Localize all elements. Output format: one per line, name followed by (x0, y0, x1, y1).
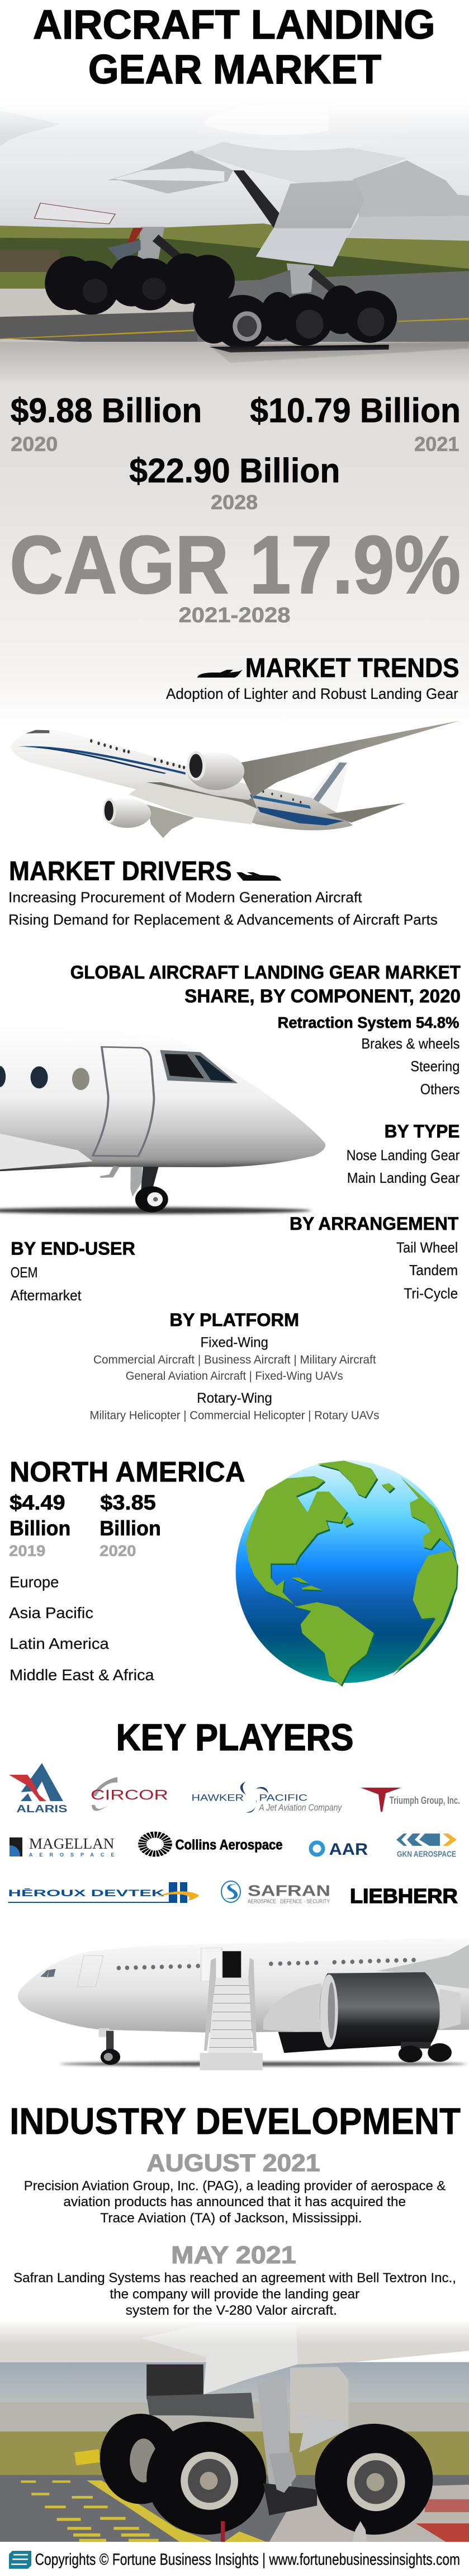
stat: 2021 market size (250, 391, 461, 455)
segment: by type: BY TYPE (385, 1121, 459, 1141)
other regions list: Latin America (10, 1635, 109, 1652)
segment: by arrangement: Tail Wheel (396, 1239, 458, 1256)
logo: Collins Aerospace (143, 1835, 283, 1854)
regional panel: north america: 2020 (100, 1542, 136, 1559)
logo: Liebherr: LIEBHERR (350, 1884, 458, 1907)
segment: by platform (89, 1310, 379, 1422)
component list: Others (420, 1081, 459, 1098)
segment: by type (347, 1121, 460, 1186)
segment: by end-user: Aftermarket (11, 1287, 82, 1304)
hero photo: aircraft landing gear (0, 100, 469, 387)
segment heading: global share by component (70, 962, 461, 1007)
logo: Hawker Pacific (191, 1781, 343, 1813)
logo: Triumph Group (361, 1788, 460, 1812)
development: May 2021 (13, 2241, 456, 2318)
segment: by arrangement: Tri-Cycle (404, 1285, 458, 1302)
development: August 2021: Precision Aviation Group, Inc. (PAG), a leading provider of aerospace & (24, 2179, 446, 2193)
stat: 2028 market size (129, 452, 340, 514)
development: August 2021 (24, 2150, 446, 2226)
stat: CAGR: 2021-2028 (179, 604, 291, 627)
business jet photo (0, 1024, 325, 1214)
logo: AAR (311, 1840, 368, 1859)
segment: by platform: Rotary-Wing (197, 1390, 272, 1406)
segment: by platform: General Aviation Aircraft | Fixed-Wing UAVs (126, 1370, 343, 1383)
title: AIRCRAFT LANDING (33, 2, 435, 48)
segment: by platform: BY PLATFORM (169, 1310, 299, 1330)
logo: Circor: CIRCOR (91, 1787, 168, 1803)
stat: 2020 market size: $9.88 Billion (11, 391, 202, 429)
logo: Hawker Pacific: PACIFIC (259, 1792, 307, 1803)
component list: Brakes & wheels (361, 1035, 459, 1052)
segment: by end-user: OEM (11, 1264, 37, 1281)
development: August 2021: Trace Aviation (TA) of Jackson, Mississippi. (100, 2211, 362, 2226)
other regions list: Asia Pacific (9, 1604, 93, 1621)
logo: Magellan Aerospace: AEROSPACE (29, 1852, 114, 1858)
segment: by platform: Military Helicopter | Commercial Helicopter | Rotary UAVs (89, 1409, 379, 1422)
logo: Heroux Devtek: HĒROUX DEVTEK (8, 1888, 165, 1898)
development: May 2021: MAY 2021 (171, 2241, 296, 2269)
segment: by type: Nose Landing Gear (347, 1147, 460, 1164)
component list: Retraction System 54.8% (278, 1014, 459, 1031)
logo: Alaris: ALARIS (16, 1803, 67, 1815)
segment: by arrangement: BY ARRANGEMENT (290, 1214, 459, 1234)
bottom photo: main landing gear close-up (0, 2319, 469, 2542)
stat: 2028 market size: $22.90 Billion (129, 452, 340, 490)
logo: Safran: SAFRAN (248, 1882, 330, 1899)
title: GEAR MARKET (88, 47, 381, 92)
component list: Steering (410, 1058, 459, 1075)
development: August 2021: aviation products has announced that it has acquired the (63, 2194, 406, 2210)
footer logo (9, 2551, 31, 2569)
logo: Circor (91, 1777, 168, 1811)
regional panel: north america: NORTH AMERICA (10, 1456, 245, 1488)
logo: Safran: AEROSPACE · DEFENCE · SECURITY (248, 1899, 330, 1905)
segment: by arrangement: Tandem (409, 1262, 458, 1278)
other regions list (9, 1573, 154, 1684)
regional panel: north america: Billion (10, 1517, 70, 1540)
logo: AAR: AAR (329, 1840, 368, 1859)
segment heading: global share by component: SHARE, BY COMPONENT, 2020 (184, 986, 461, 1007)
icon: globe (236, 1460, 458, 1687)
segment: by platform: Fixed-Wing (200, 1335, 268, 1351)
other regions list: Middle East & Africa (10, 1666, 154, 1684)
title (33, 2, 435, 92)
logo: Collins Aerospace: Collins Aerospace (176, 1837, 283, 1853)
segment: by platform: Commercial Aircraft | Business Aircraft | Military Aircraft (93, 1353, 376, 1366)
logo: Alaris (9, 1763, 67, 1815)
development: August 2021: AUGUST 2021 (146, 2150, 320, 2177)
logo: Magellan Aerospace: MAGELLAN (29, 1835, 114, 1852)
segment: by type: Main Landing Gear (347, 1169, 460, 1186)
stat: 2028 market size: 2028 (211, 491, 258, 514)
logo: Heroux Devtek (8, 1882, 199, 1903)
regional panel: north america (9, 1456, 245, 1559)
market driver text: Increasing Procurement of Modern Generation Aircraft (8, 889, 362, 905)
development: May 2021: Safran Landing Systems has reached an agreement with Bell Textron Inc., (13, 2271, 456, 2286)
segment heading: global share by component: GLOBAL AIRCRAFT LANDING GEAR MARKET (70, 962, 461, 983)
airliner in flight illustration (11, 721, 459, 838)
market driver text (8, 889, 438, 928)
stat: 2021 market size: $10.79 Billion (250, 391, 461, 429)
logo: Hawker Pacific: HAWKER (191, 1792, 244, 1803)
development: May 2021: system for the V-280 Valor aircraft. (126, 2303, 337, 2318)
logo: Safran (221, 1881, 330, 1905)
other regions list: Europe (10, 1573, 59, 1591)
regional panel: north america: $4.49 (10, 1491, 65, 1514)
logo: Hawker Pacific: A Jet Aviation Company (259, 1802, 343, 1813)
stat: 2020 market size: 2020 (11, 433, 58, 455)
market trend text: Adoption of Lighter and Robust Landing Gear (166, 685, 458, 702)
stat: 2020 market size (11, 391, 202, 455)
page background gradient (0, 364, 469, 727)
development: May 2021: the company will provide the landing gear (110, 2287, 359, 2302)
airliner at stairs photo (18, 1938, 469, 2070)
regional panel: north america: Billion (100, 1517, 161, 1540)
market driver text: Rising Demand for Replacement & Advancements of Aircraft Parts (8, 911, 438, 928)
regional panel: north america: $3.85 (100, 1491, 156, 1514)
key players heading: KEY PLAYERS (116, 1717, 353, 1759)
segment: by end-user (11, 1238, 135, 1304)
component list (278, 1014, 459, 1098)
segment: by end-user: BY END-USER (11, 1238, 135, 1258)
stat: 2021 market size: 2021 (414, 433, 459, 455)
regional panel: north america: 2019 (9, 1542, 45, 1559)
logo: GKN Aerospace: GKN AEROSPACE (397, 1849, 456, 1859)
logo: Magellan Aerospace (10, 1835, 114, 1858)
logo: GKN Aerospace (396, 1834, 457, 1859)
market drivers heading with plane icon: MARKET DRIVERS (9, 857, 232, 886)
segment: by arrangement (290, 1214, 459, 1302)
